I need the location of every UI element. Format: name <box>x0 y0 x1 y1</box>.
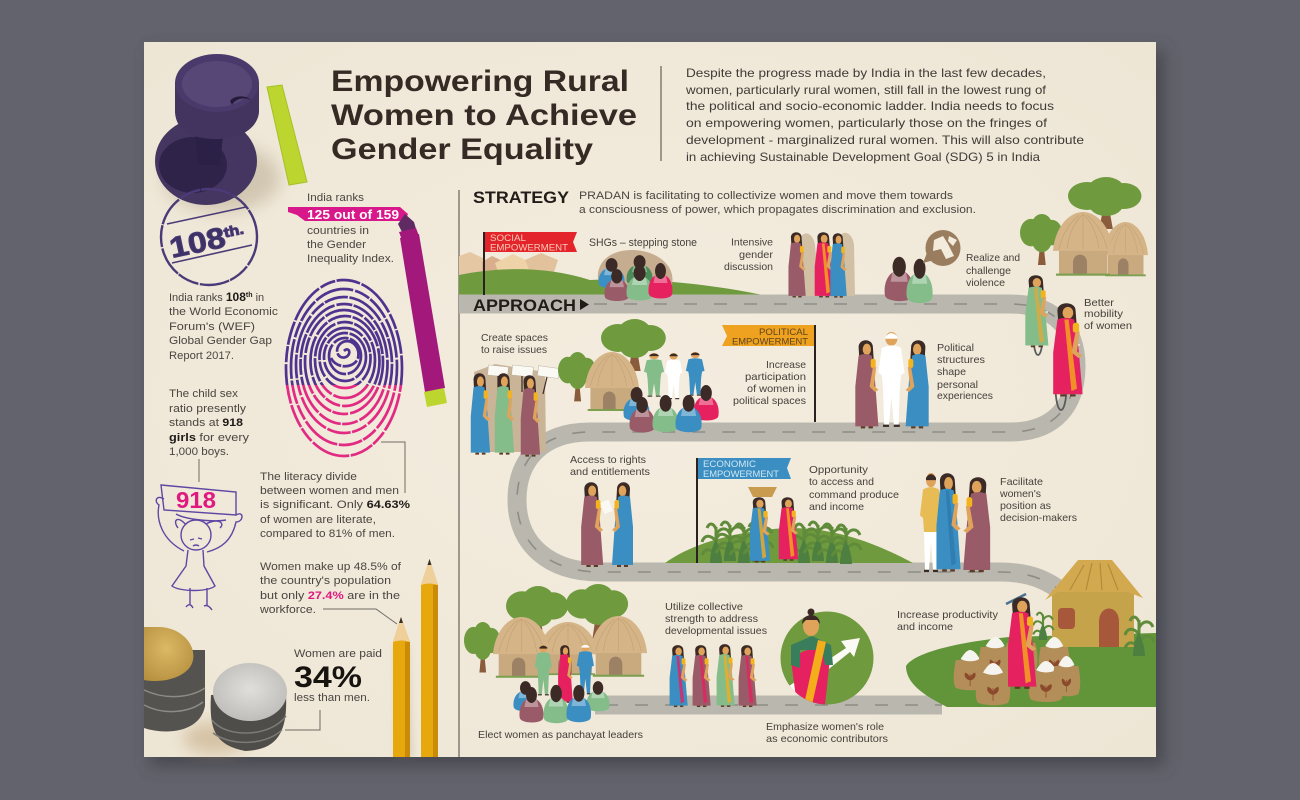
text: India ranks 125 out of 159: 125 out of 159 <box>307 207 399 222</box>
text: facilitate: Facilitate <box>1000 476 1043 488</box>
text: facilitate: position as <box>1000 500 1051 512</box>
text: workforce <box>259 561 402 616</box>
text: intensive gender discussion: Intensive <box>731 236 773 248</box>
flag: political empowerment: EMPOWERMENT <box>732 336 809 346</box>
flag: social empowerment: SOCIAL <box>490 233 526 243</box>
village with men and seated women <box>558 319 719 432</box>
text: facilitate <box>999 476 1077 524</box>
intro paragraph: Despite the progress made by India in the last few decades, <box>686 66 1046 80</box>
text: elect women: Elect women as panchayat leaders <box>478 729 643 741</box>
strategy description <box>579 190 976 216</box>
text: better mobility: of women <box>1084 320 1132 332</box>
text: increase participation: participation <box>745 371 806 383</box>
text: realize and challenge violence: violence <box>966 277 1005 289</box>
text: access to rights: Access to rights <box>570 454 646 466</box>
text: workforce: but only 27.4% are in the <box>260 590 400 602</box>
text: WEF ranking: the World Economic <box>169 306 279 318</box>
text: facilitate: women's <box>999 488 1041 500</box>
economic hill with crops <box>665 522 913 564</box>
girl holding 918 sign <box>156 485 242 610</box>
huts and trees top right <box>1020 177 1148 276</box>
text: child sex ratio: stands at 918 <box>169 417 243 429</box>
text: women are paid 34% less <box>294 648 382 704</box>
circle: woman with growth arrow <box>780 608 874 705</box>
farm hill <box>906 633 1156 707</box>
text: literacy divide: is significant. Only 64.63% <box>260 499 410 511</box>
text: facilitate: decision-makers <box>1000 512 1077 524</box>
title: Gender Equality <box>331 133 593 166</box>
icon: green marker cap <box>267 85 307 185</box>
text: workforce: workforce. <box>259 604 316 616</box>
text: better mobility: mobility <box>1084 308 1124 320</box>
intro paragraph: the political and socio-economic ladder. India needs to focus <box>686 99 1054 113</box>
protesting women <box>471 364 560 457</box>
text: increase participation: of women in <box>747 383 806 395</box>
text: emphasize women's role: as economic contributors <box>766 733 888 745</box>
icon: violence speech bubble <box>923 230 960 266</box>
title: Empowering Rural <box>331 65 629 98</box>
text: child sex ratio: girls for every <box>169 432 250 444</box>
woman farmer with hoe <box>1006 594 1036 689</box>
text: WEF ranking: India ranks 108 <box>169 290 246 304</box>
text: literacy divide <box>260 471 410 540</box>
text: access to rights <box>570 454 650 478</box>
road <box>459 304 1076 705</box>
four women holding hands <box>670 644 757 707</box>
text: WEF ranking: Global Gender Gap <box>169 335 272 347</box>
text: literacy divide: The literacy divide <box>260 471 357 483</box>
text: increase participation <box>733 359 806 407</box>
icon: coins <box>144 627 287 754</box>
women with political leader <box>855 332 929 428</box>
text: create spaces: to raise issues <box>481 344 547 356</box>
text: literacy divide: compared to 81% of men. <box>260 528 395 540</box>
text: realize and challenge violence: challenge <box>966 265 1011 277</box>
text: emphasize women's role <box>766 721 888 745</box>
text: child sex ratio <box>169 388 250 458</box>
text: increase productivity: Increase productivity <box>897 609 999 621</box>
text: India ranks 125 out of 159: countries in <box>307 225 369 237</box>
text: better mobility <box>1084 297 1132 332</box>
text: realize and challenge violence <box>966 252 1020 289</box>
women farmers <box>748 487 798 562</box>
intro paragraph: in achieving Sustainable Development Goal (SDG) 5 in India <box>686 150 1040 164</box>
text: women are paid 34% less: Women are paid <box>294 648 382 660</box>
heading: strategy: STRATEGY <box>473 188 570 207</box>
text: child sex ratio: ratio presently <box>169 403 247 415</box>
text: utilize collective strength: strength to address <box>665 613 758 625</box>
flag: political empowerment: POLITICAL <box>759 327 808 337</box>
text: WEF ranking: Report 2017. <box>169 350 234 362</box>
text: women are paid 34% less: 34% <box>294 661 362 694</box>
intro paragraph: on empowering women, particularly those on the fringes of <box>686 116 1048 130</box>
text: create spaces <box>481 332 548 356</box>
text: intensive gender discussion: gender <box>739 249 774 261</box>
text: WEF ranking: in <box>253 292 264 304</box>
text: increase participation: Increase <box>766 359 806 371</box>
page shadow <box>150 50 1164 766</box>
text: utilize collective strength: developmental issues <box>665 625 767 637</box>
text: WEF ranking <box>169 290 279 362</box>
text: opportunity: and income <box>809 501 864 513</box>
text: increase productivity <box>897 609 999 633</box>
text: literacy divide: of women are literate, <box>260 514 376 526</box>
social empowerment landscape <box>459 252 763 295</box>
stamp print 108th: 108 <box>167 223 221 265</box>
text: workforce: the country's population <box>260 575 391 587</box>
text: political structures: experiences <box>937 390 993 402</box>
text: opportunity: command produce <box>809 489 899 501</box>
callout line to pencil <box>323 609 397 624</box>
text: increase participation: political spaces <box>733 395 806 407</box>
SHGs group: SHGs – stepping stone <box>589 237 697 249</box>
girl holding 918 sign: 918 <box>176 487 216 513</box>
text: realize and challenge violence: Realize and <box>966 252 1020 264</box>
callout line from fingerprint <box>381 442 405 493</box>
icon: fingerprint <box>286 280 402 456</box>
flag: social empowerment <box>483 232 577 295</box>
text: WEF ranking: th <box>246 292 253 299</box>
decision makers group <box>920 473 990 572</box>
text: political structures <box>937 342 993 402</box>
farm hut <box>1033 560 1154 656</box>
text: India ranks 125 out of 159: Inequality Index. <box>307 253 394 265</box>
text: better mobility: Better <box>1084 297 1115 309</box>
text: workforce: Women make up 48.5% of <box>260 561 402 573</box>
text: intensive gender discussion: discussion <box>724 261 773 273</box>
text: emphasize women's role: Emphasize women's role <box>766 721 884 733</box>
stamp print 108th: th. <box>222 221 245 240</box>
intro paragraph: development - marginalized rural women. This will also contribute <box>686 133 1084 147</box>
icon: pencils <box>393 559 438 757</box>
column divider <box>458 190 460 757</box>
text: women are paid 34% less: less than men. <box>294 692 370 704</box>
seated pair <box>885 257 933 303</box>
text: opportunity: to access and <box>809 476 874 488</box>
text: literacy divide: between women and men <box>260 485 399 497</box>
divider <box>660 66 662 161</box>
text: intensive gender discussion <box>724 236 774 273</box>
icon: rubber stamp <box>155 54 280 212</box>
text: increase productivity: and income <box>897 621 953 633</box>
text: access to rights: and entitlements <box>570 466 650 478</box>
women on bicycles <box>1025 275 1083 410</box>
marker with pink highlight <box>288 207 447 407</box>
text: opportunity: Opportunity <box>809 464 869 476</box>
text: WEF ranking: Forum's (WEF) <box>169 321 255 333</box>
text: political structures: structures <box>937 354 985 366</box>
text: create spaces: Create spaces <box>481 332 548 344</box>
text: India ranks 125 out of 159 <box>307 192 399 265</box>
text: India ranks 125 out of 159: India ranks <box>307 192 365 204</box>
text: political structures: shape <box>937 366 966 378</box>
text: utilize collective strength <box>665 601 767 637</box>
text: India ranks 125 out of 159: the Gender <box>307 239 366 251</box>
two women with paper <box>581 482 633 567</box>
SHGs group <box>589 237 697 301</box>
label: approach: APPROACH <box>473 296 576 315</box>
strategy description: PRADAN is facilitating to collectivize women and move them towards <box>579 190 954 202</box>
callout line to girl <box>198 459 200 482</box>
text: opportunity <box>809 464 899 513</box>
intro paragraph: women, particularly rural women, still fall in the lowest rung of <box>685 83 1047 97</box>
flag: political empowerment <box>722 325 816 422</box>
text: child sex ratio: The child sex <box>169 388 239 400</box>
strategy description: a consciousness of power, which propagates discrimination and exclusion. <box>579 204 976 216</box>
intro paragraph <box>685 66 1084 164</box>
text: political structures: Political <box>937 342 974 354</box>
women in discussion <box>788 232 855 298</box>
text: child sex ratio: 1,000 boys. <box>169 446 229 458</box>
paper panel <box>144 42 1156 757</box>
flag: economic empowerment: ECONOMIC <box>703 459 757 469</box>
flag: economic empowerment <box>696 458 791 563</box>
stamp print 108th <box>161 189 257 285</box>
village panchayat scene <box>464 584 647 723</box>
text: utilize collective strength: Utilize collective <box>665 601 743 613</box>
flag: economic empowerment: EMPOWERMENT <box>703 469 780 479</box>
sacks of grain <box>954 633 1080 705</box>
text: political structures: personal <box>937 379 978 391</box>
title <box>331 65 637 166</box>
callout line from coins <box>285 710 320 730</box>
title: Women to Achieve <box>331 99 637 132</box>
flag: social empowerment: EMPOWERMENT <box>490 242 569 252</box>
